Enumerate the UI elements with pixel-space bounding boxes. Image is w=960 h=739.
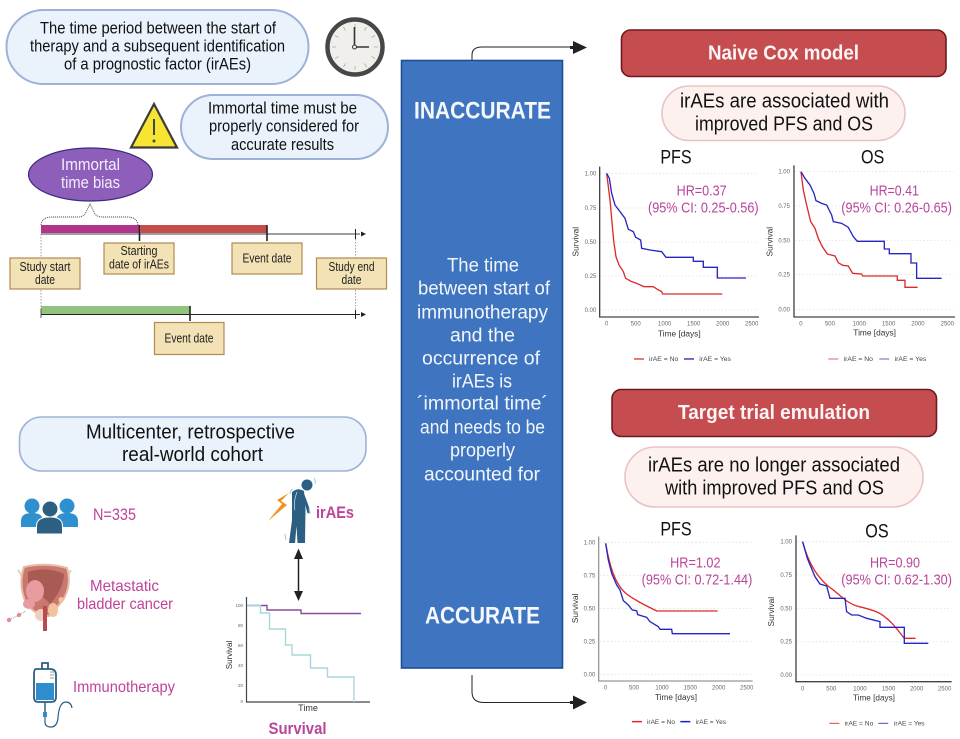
chart: naive OS: irAE = No [844,356,873,363]
chart: survival schematic [225,597,370,713]
chart: naive PFS: irAE = Yes [699,356,732,363]
panel: central message: and the [450,326,515,346]
label: event date upper: Event date [242,250,292,266]
chart: naive OS [765,147,955,363]
callout: naive result: irAEs are associated with [680,90,889,112]
panel: central message [402,60,562,668]
label: immortal time bias ellipse: time bias [61,173,120,192]
label: metastatic bladder cancer: Metastatic [90,578,159,595]
panel: central message: INACCURATE [414,98,551,124]
chart: naive PFS: Survival [571,227,581,256]
chart: naive OS: 0.00 [778,307,791,313]
heading: target trial emulation [612,390,936,436]
callout: immortal time must be considered: Immortal time must be [208,98,357,118]
icon: bladder [7,565,71,631]
chart: naive PFS: 500 [631,322,641,328]
label: metastatic bladder cancer [77,578,174,613]
chart: survival schematic: 40 [238,663,243,668]
chart: target trial PFS: 2500 [740,686,754,692]
callout: immortal time must be considered: properly considered for [209,116,359,136]
chart: naive OS: 500 [825,322,836,328]
chart: naive PFS: HR=0.37 [677,183,727,200]
heading: naive cox model: Naive Cox model [708,42,859,64]
chart: naive OS: 0.50 [778,238,791,244]
chart: naive PFS [571,147,759,363]
chart: survival schematic: 80 [238,623,243,628]
chart: naive OS: 2500 [941,322,955,328]
timeline: with irAEs [41,225,366,314]
chart: naive PFS: irAE = No [649,356,679,363]
chart: survival schematic: 0 [240,699,243,704]
icon: iv bag [34,663,72,727]
chart: target trial PFS: irAE = No [647,719,675,726]
chart: target trial OS: HR=0.90 [870,555,920,572]
panel: central message: occurrence of [422,348,541,370]
chart: naive OS: 1500 [882,322,896,328]
label: metastatic bladder cancer: bladder cancer [77,596,174,613]
chart: target trial PFS: 0.75 [584,573,596,579]
chart: naive OS: Time [days] [853,328,896,338]
chart: target trial PFS: PFS [660,519,692,540]
label: starting date of irAEs: Starting [120,243,158,258]
chart: target trial PFS: irAE = Yes [696,719,727,726]
chart: target trial OS: 0.75 [780,573,793,579]
chart: target trial PFS: 0.00 [584,672,596,678]
chart: naive PFS: 2500 [745,322,759,328]
chart: naive PFS: 1000 [658,322,672,328]
chart: target trial OS: 1500 [882,686,896,692]
chart: target trial OS: 1.00 [780,540,793,546]
chart: naive OS: OS [861,147,884,168]
panel: central message: The time [447,256,519,276]
callout: target trial result: with improved PFS and OS [664,478,884,500]
chart: target trial PFS: 0 [604,686,608,692]
chart: naive PFS: 1500 [687,322,701,328]
chart: target trial OS: irAE = Yes [894,720,925,727]
chart: target trial OS: 0.00 [780,673,793,679]
chart: target trial PFS: (95% CI: 0.72-1.44) [642,571,752,588]
chart: target trial OS [766,521,952,727]
chart: target trial PFS: 1.00 [584,540,596,546]
chart: naive OS: irAE = Yes [895,356,927,363]
callout: definition of immortal time period: The time period between the start of [40,18,276,38]
label: event date lower [154,322,224,354]
chart: survival schematic: 20 [238,683,243,688]
heading: multicenter cohort: real-world cohort [122,444,263,466]
heading: multicenter cohort: Multicenter, retrospective [86,422,295,444]
chart: naive PFS: 0 [605,322,609,328]
label: immortal time bias ellipse: Immortal [61,155,120,174]
chart: target trial PFS: 500 [629,686,640,692]
chart: target trial OS: irAE = No [845,720,874,727]
callout: naive result [662,86,905,140]
arrow: to inaccurate result [472,41,587,60]
chart: target trial PFS: Time [days] [655,692,697,702]
chart: target trial PFS: 2000 [712,686,726,692]
label: study end date: Study end [328,259,374,274]
panel: central message: between start of [418,278,551,300]
label: study start date: date [35,272,55,287]
label: starting date of irAEs: date of irAEs [109,256,169,272]
chart: target trial OS: OS [865,521,889,542]
arrow: to accurate result [472,675,587,710]
callout: definition of immortal time period [6,10,308,84]
chart: naive OS: 1000 [853,322,867,328]
arrow: double-headed [294,548,303,601]
heading: multicenter cohort [20,417,366,471]
chart: naive PFS: 0.25 [585,274,597,280]
icon: person in pain [268,478,315,543]
chart: target trial PFS: 1500 [684,686,698,692]
chart: target trial OS: 0 [801,686,805,692]
label: study start date [10,258,80,289]
chart: naive OS: 2000 [911,322,925,328]
chart: target trial PFS: 0.25 [584,639,596,645]
chart: survival schematic: 100 [235,603,243,608]
panel: central message: irAEs is [452,372,512,392]
icon: warning triangle [131,104,177,148]
callout: naive result: improved PFS and OS [695,114,873,136]
panel: central message: accounted for [424,464,541,486]
panel: central message: and needs to be [420,418,545,438]
chart: target trial PFS: HR=1.02 [670,555,720,572]
chart: target trial PFS [570,519,754,726]
callout: definition of immortal time period: of a prognostic factor (irAEs) [64,54,251,74]
chart: naive PFS: 2000 [716,322,730,328]
callout: definition of immortal time period: therapy and a subsequent identification [30,36,285,56]
label: event date lower: Event date [164,330,214,346]
chart: survival schematic: Survival [225,641,234,669]
chart: naive OS: 0.75 [778,204,791,210]
label: event date upper [232,243,302,274]
brace over immortal period [41,204,138,225]
chart: target trial OS: 1000 [853,686,867,692]
chart: target trial OS: Survival [766,597,776,626]
chart: target trial OS: 0.25 [780,640,793,646]
chart: naive PFS: 1.00 [585,171,597,177]
chart: naive OS: HR=0.41 [870,183,919,200]
callout: target trial result: irAEs are no longer associated [648,454,900,476]
chart: target trial OS: 0.50 [780,606,793,612]
label: irAEs: irAEs [316,503,354,522]
chart: target trial OS: 2000 [910,686,924,692]
callout: immortal time must be considered [181,95,388,159]
chart: target trial PFS: Survival [570,593,580,623]
chart: target trial PFS: 0.50 [584,606,596,612]
chart: target trial PFS: 1000 [655,686,669,692]
label: study end date [316,258,386,289]
panel: central message: properly [450,440,515,462]
chart: target trial OS: Time [days] [853,693,895,703]
panel: central message: immunotherapy [417,302,548,324]
chart: naive OS: Survival [765,227,775,256]
chart: naive PFS: PFS [660,147,692,168]
timeline: comparison [41,306,366,321]
chart: survival schematic: 60 [238,643,243,648]
label: survival: Survival [268,719,326,738]
chart: naive OS: 0.25 [778,273,791,279]
callout: target trial result [625,447,923,507]
label: sample size: N=335 [93,505,136,524]
label: immunotherapy: Immunotherapy [73,679,175,696]
label: study end date: date [342,272,362,287]
chart: naive PFS: 0.75 [585,206,597,212]
heading: target trial emulation: Target trial emulation [678,401,870,424]
chart: naive PFS: 0.00 [585,308,597,314]
chart: target trial OS: 2500 [938,686,952,692]
panel: central message: ACCURATE [425,602,540,630]
icon: people [21,498,78,534]
chart: naive PFS: 0.50 [585,240,597,246]
label: immortal time bias ellipse [28,148,152,201]
chart: target trial OS: 500 [826,686,837,692]
label: study start date: Study start [20,259,71,274]
chart: survival schematic: Time [298,703,318,713]
chart: naive OS: 0 [799,322,803,328]
panel: central message: ´immortal time´ [417,394,548,414]
icon: clock [328,20,382,74]
callout: immortal time must be considered: accurate results [231,135,334,154]
chart: naive OS: 1.00 [778,170,791,176]
heading: naive cox model [622,30,946,76]
chart: naive PFS: Time [days] [658,329,701,339]
label: starting date of irAEs [104,243,174,274]
chart: naive PFS: (95% CI: 0.25-0.56) [648,199,759,216]
